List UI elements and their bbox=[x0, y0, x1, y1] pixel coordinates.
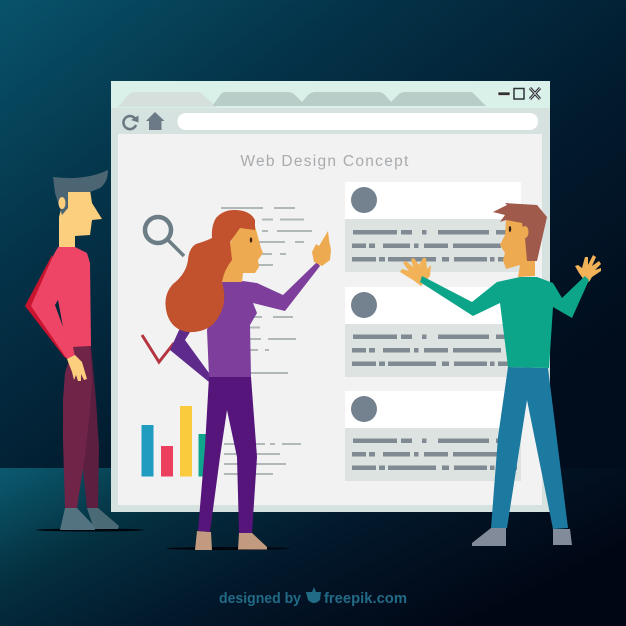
icon: magnifier bbox=[145, 217, 184, 256]
address bar bbox=[178, 113, 538, 130]
trousers bbox=[491, 367, 568, 529]
window controls bbox=[498, 88, 540, 99]
page content area bbox=[118, 134, 542, 505]
trousers bbox=[198, 377, 257, 533]
card 1 bbox=[345, 182, 521, 272]
left hand bbox=[400, 258, 431, 286]
hair bbox=[53, 170, 108, 215]
arm shadow bbox=[25, 255, 72, 358]
icon: check mark bbox=[142, 335, 174, 362]
person: woman in centre bbox=[165, 210, 331, 550]
credit text left: designed by bbox=[219, 591, 301, 607]
inactive tabs bbox=[213, 92, 486, 106]
trousers bbox=[63, 346, 92, 508]
sweater bbox=[31, 247, 91, 359]
ground shadow bbox=[36, 528, 144, 532]
neck and face bbox=[500, 220, 535, 277]
active tab bbox=[118, 92, 217, 107]
card 3 bbox=[345, 391, 521, 481]
person: man on right bbox=[400, 203, 601, 546]
browser window bbox=[111, 81, 550, 512]
sweater and arms bbox=[420, 276, 589, 368]
window frame bbox=[111, 81, 550, 512]
title: Web Design Concept bbox=[240, 153, 410, 170]
hair bbox=[165, 210, 255, 332]
background floor bbox=[0, 468, 626, 626]
ear bbox=[522, 226, 528, 238]
feet bbox=[195, 531, 212, 550]
ear bbox=[58, 197, 66, 209]
footer credit bbox=[219, 587, 407, 607]
eye bbox=[250, 238, 252, 242]
hair bbox=[493, 203, 547, 261]
neck and face bbox=[59, 190, 102, 247]
person: man on left bbox=[25, 170, 144, 532]
back leg bbox=[82, 346, 99, 508]
back arm bbox=[170, 328, 209, 382]
hand bbox=[312, 231, 331, 266]
left text lines bbox=[221, 207, 312, 475]
arm gap bbox=[55, 300, 63, 327]
shoes bbox=[87, 508, 119, 529]
sweater and raised arm bbox=[207, 262, 320, 377]
shoes bbox=[472, 528, 506, 546]
icon: freepik logo bbox=[306, 587, 321, 603]
neck and face bbox=[222, 226, 263, 282]
credit text right: freepik.com bbox=[324, 591, 407, 607]
ground shadow bbox=[166, 547, 290, 550]
card 2 bbox=[345, 287, 521, 377]
bar chart bbox=[142, 406, 210, 476]
eye bbox=[509, 226, 511, 232]
hand bbox=[67, 355, 87, 381]
icon: refresh bbox=[123, 116, 138, 129]
icon: home bbox=[146, 112, 164, 130]
background wall bbox=[0, 0, 626, 468]
window title strip bbox=[111, 81, 550, 108]
right hand bbox=[575, 255, 601, 282]
